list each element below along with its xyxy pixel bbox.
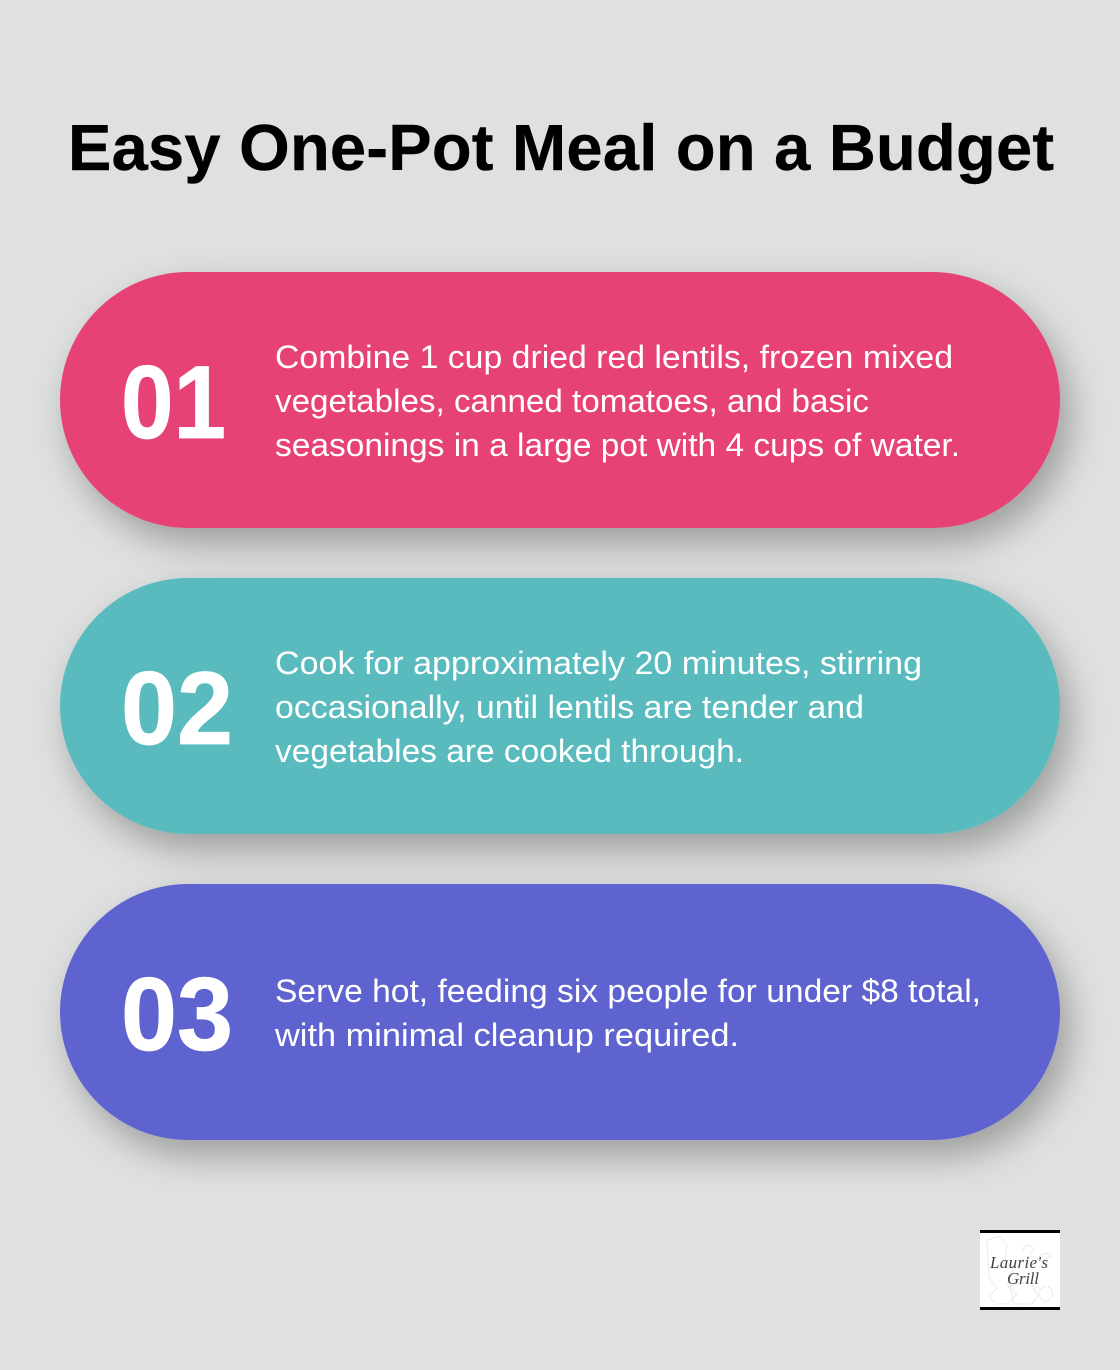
title: Easy One-Pot Meal on a Budget [68,111,1054,184]
text: step 01 description: vegetables, canned tomatoes, and basic [275,383,869,419]
logo: Laurie's Grill: Grill [1007,1269,1039,1288]
text: step 03 description: Serve hot, feeding six people for under $8 total, [275,973,981,1009]
text: step 01 description [275,339,960,463]
text: step 02 description: vegetables are cooked through. [275,733,744,769]
text: step 02 description: Cook for approximately 20 minutes, stirring [275,645,922,681]
text: step 03 description [274,973,981,1053]
panel: step 01 [60,272,1060,528]
pill background: step 02 [60,578,1060,834]
logo: Laurie's Grill [980,1230,1060,1310]
number: 02: 02 [121,651,233,767]
text: step 01 description: Combine 1 cup dried red lentils, frozen mixed [275,339,953,375]
number: 03: 03 [121,957,233,1073]
pill background: step 01 [60,272,1060,528]
number: 01: 01 [121,345,226,461]
text: step 02 description: occasionally, until lentils are tender and [275,689,864,725]
logo: Laurie's Grill: Laurie's [989,1253,1048,1272]
panel: step 02 [60,578,1060,834]
text: step 03 description: with minimal cleanup required. [274,1017,739,1053]
text: step 02 description [275,645,922,769]
text: step 01 description: seasonings in a large pot with 4 cups of water. [275,427,960,463]
panel: step 03 [60,884,1060,1140]
pill background: step 03 [60,884,1060,1140]
